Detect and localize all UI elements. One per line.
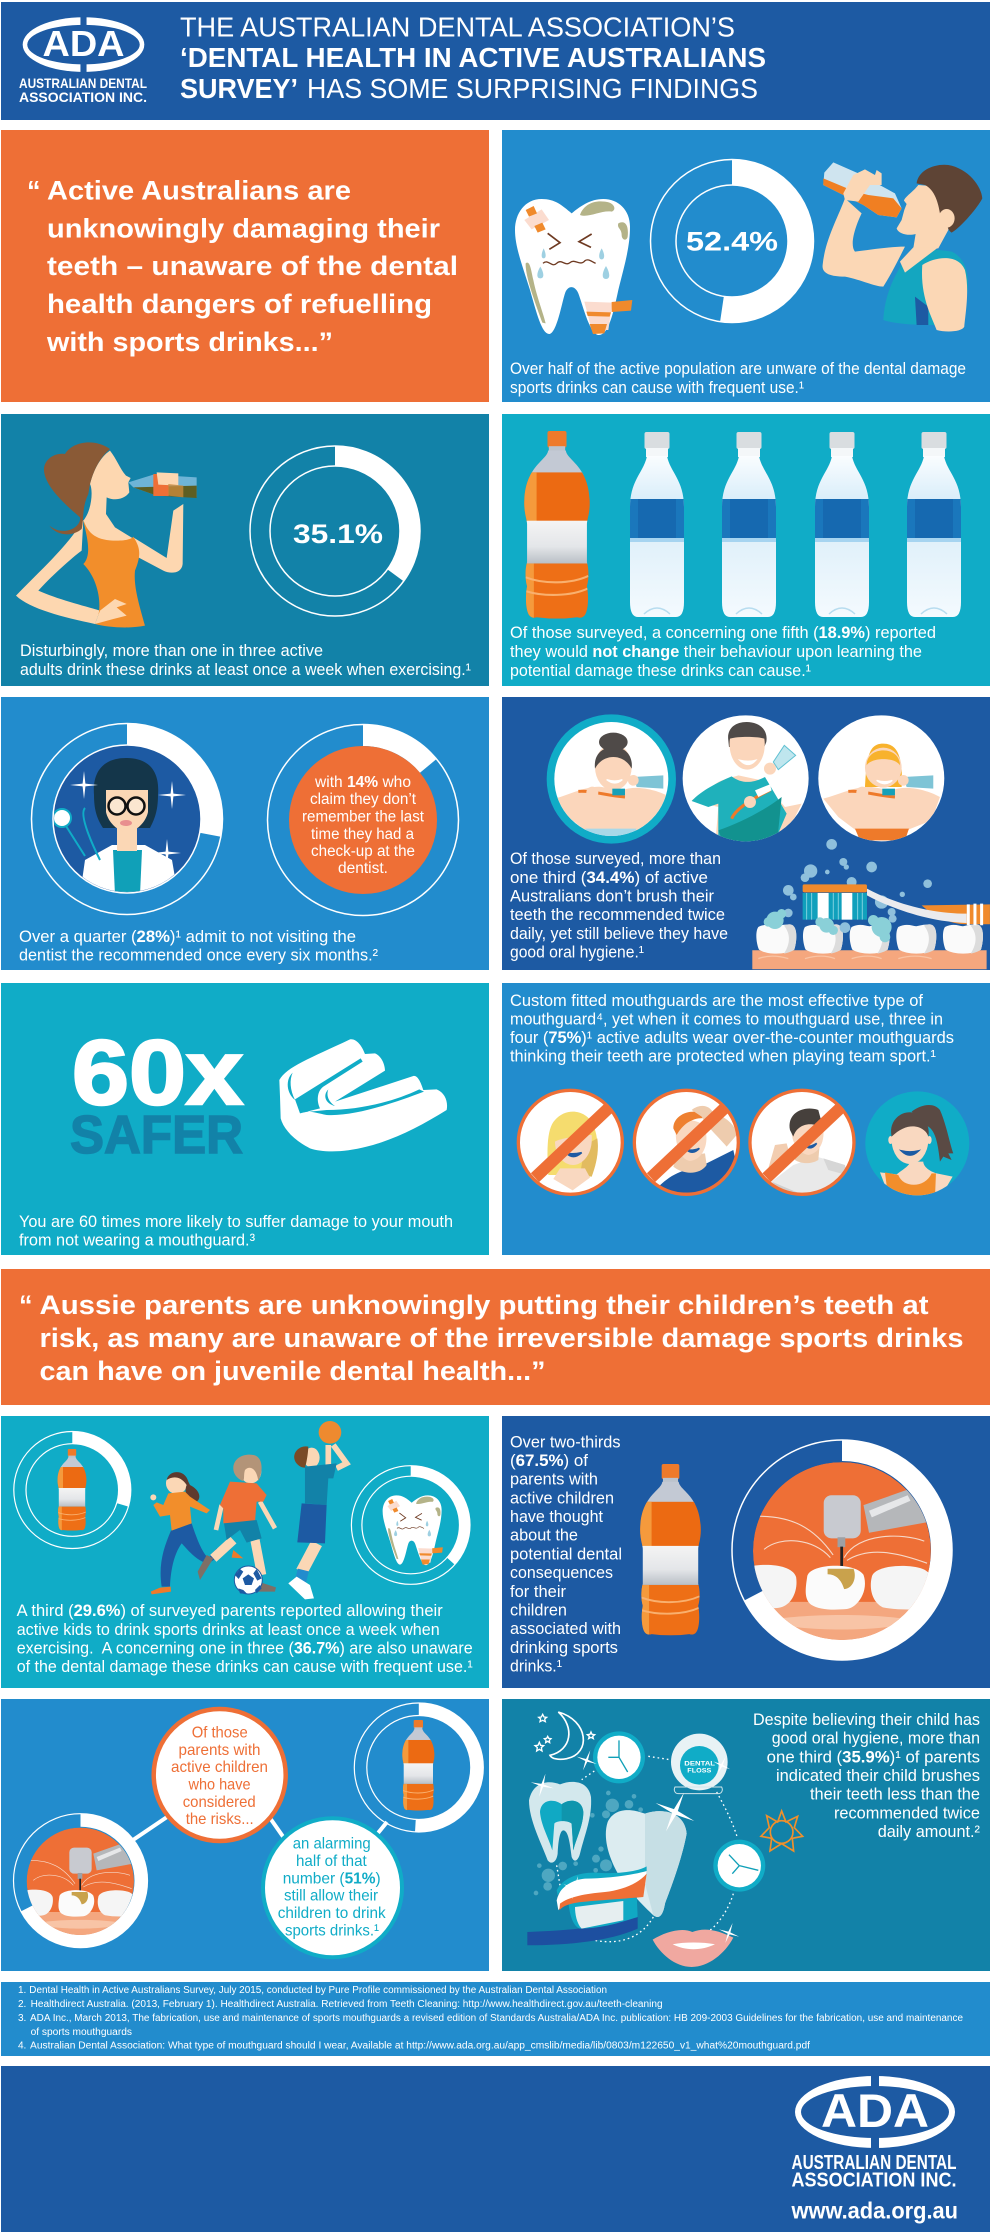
donut chart: 35.1% xyxy=(250,446,420,616)
caption: teeth the recommended twice xyxy=(510,906,725,924)
caption: associated with xyxy=(510,1620,621,1638)
caption xyxy=(510,850,728,962)
donut chart: 14% callout xyxy=(268,724,458,916)
caption: Over half of the active population are unware of the dental damage xyxy=(510,360,966,378)
donut chart: drill xyxy=(14,1814,148,1948)
caption: mouthguard⁴, yet when it comes to mouthguard use, three in xyxy=(510,1010,943,1028)
caption: daily amount.² xyxy=(878,1823,980,1841)
caption xyxy=(20,642,471,679)
caption: potential damage these drinks can cause.¹ xyxy=(510,662,811,680)
quote banner: Aussie parents: “ xyxy=(19,1290,32,1320)
quote banner: Aussie parents: can have on juvenile dental health...” xyxy=(40,1356,546,1386)
panel: 35.1 percent drink weekly xyxy=(1,414,489,686)
callout: half of that number: children to drink xyxy=(278,1905,387,1922)
donut chart: 29.6% with bottle xyxy=(14,1432,131,1548)
caption xyxy=(510,624,936,680)
illustration: toothbrush on teeth xyxy=(752,839,990,969)
icon: water bottles xyxy=(630,432,961,617)
quote text: “ xyxy=(27,176,40,206)
panel: mouthguards xyxy=(502,983,990,1255)
header title: HAS SOME SURPRISING FINDINGS xyxy=(307,73,758,104)
quote banner: Aussie parents: risk, as many are unaware of the irreversible damage sports drinks xyxy=(40,1323,964,1353)
caption: good oral hygiene.¹ xyxy=(510,944,644,962)
caption xyxy=(17,1602,473,1676)
caption: of the dental damage these drinks can cause with frequent use.¹ xyxy=(17,1658,473,1676)
icons: faces with mouthguards xyxy=(518,1090,969,1198)
footer xyxy=(1,2066,990,2232)
footnotes: Dental Health in Active Australians Survey, July 2015, conducted by Pure Profile commissioned by the Australian Dental Association xyxy=(29,1985,607,1996)
donut chart: 67.5% with drill xyxy=(732,1440,952,1660)
caption: they would not change their behaviour upon learning the xyxy=(510,643,922,661)
caption: recommended twice xyxy=(834,1804,980,1822)
ADA logo: ASSOCIATION INC. xyxy=(792,2170,956,2192)
ADA logo: ADA xyxy=(821,2084,929,2137)
illustration: dental care routine: FLOSS xyxy=(687,1768,711,1775)
illustration: dental care routine: DENTAL xyxy=(684,1761,715,1768)
callout: half of that number xyxy=(263,1818,402,1957)
illustration: woman drinking xyxy=(16,442,197,627)
footnotes: 2. xyxy=(18,1999,26,2010)
icon: damaged tooth xyxy=(515,199,632,335)
callout: half of that number: an alarming xyxy=(293,1836,371,1853)
quote text: Active Australians are xyxy=(47,176,351,206)
donut chart: bottle xyxy=(354,1703,483,1832)
illustration: man drinking xyxy=(823,162,982,331)
icon: sports drink bottle xyxy=(523,431,591,620)
caption xyxy=(510,1433,622,1675)
donut chart: 52.4%: 52.4% xyxy=(686,227,778,257)
callout: those parents: active children xyxy=(171,1759,268,1776)
caption: have thought xyxy=(510,1508,603,1526)
caption: one third (35.9%)¹ of parents xyxy=(767,1748,980,1766)
donut chart: 36.7% with tooth xyxy=(351,1466,470,1584)
caption: potential dental xyxy=(510,1545,622,1563)
quote text: with sports drinks...” xyxy=(46,327,333,357)
illustration: children playing sport xyxy=(150,1421,347,1599)
quote text: health dangers of refuelling xyxy=(47,289,432,319)
caption: thinking their teeth are protected when playing team sport.¹ xyxy=(510,1048,936,1066)
caption: indicated their child brushes xyxy=(776,1767,980,1785)
quote banner: Aussie parents: Aussie parents are unknowingly putting their children’s teeth at xyxy=(40,1290,928,1320)
caption: sports drinks can cause with frequent use.¹ xyxy=(510,379,804,397)
caption: daily, yet still believe they have xyxy=(510,925,728,943)
icon: mouthguard xyxy=(279,1039,447,1151)
header title xyxy=(180,12,766,104)
quote banner: Aussie parents xyxy=(1,1269,990,1405)
panel: dentist visits xyxy=(1,697,489,970)
donut chart: 14% callout: with 14% who xyxy=(314,774,411,791)
caption xyxy=(753,1711,980,1841)
caption: their teeth less than the xyxy=(810,1786,980,1804)
donut chart: 14% callout: remember the last xyxy=(302,809,425,826)
caption: active children xyxy=(510,1489,614,1507)
callout: those parents: who have xyxy=(188,1777,251,1794)
ADA logo: AUSTRALIAN DENTAL xyxy=(19,75,147,91)
donut chart: 14% callout: check-up at the xyxy=(311,843,415,860)
caption: drinking sports xyxy=(510,1639,618,1657)
ADA logo xyxy=(19,16,147,105)
header title: THE AUSTRALIAN DENTAL ASSOCIATION’S xyxy=(180,12,735,43)
ADA logo: ASSOCIATION INC. xyxy=(19,89,147,105)
panel: brushing habits xyxy=(502,697,990,970)
callout: those parents xyxy=(154,1709,286,1841)
footnotes: Australian Dental Association: What type of mouthguard should I wear, Available at http://www.ada.org.au/app_cmslib/media/lib/0803/m122650_v1_what%20mouthguard.pdf xyxy=(30,2041,810,2052)
donut chart: 35.1%: 35.1% xyxy=(293,519,383,549)
footnotes: of sports mouthguards xyxy=(31,2027,132,2038)
illustration: dental care routine xyxy=(527,1712,803,1967)
caption: good oral hygiene, more than xyxy=(772,1730,980,1748)
caption: Despite believing their child has xyxy=(753,1711,980,1729)
caption: (67.5%) of xyxy=(510,1452,588,1470)
caption: active kids to drink sports drinks at least once a week when xyxy=(17,1621,440,1639)
footnotes: 1. xyxy=(18,1985,26,1996)
caption: about the xyxy=(510,1527,578,1545)
quote text xyxy=(27,176,458,357)
caption: Custom fitted mouthguards are the most effective type of xyxy=(510,992,923,1010)
caption xyxy=(19,928,378,964)
donut chart: 28% with dentist xyxy=(32,724,222,914)
callout: those parents: parents with xyxy=(178,1742,260,1759)
caption: for their xyxy=(510,1583,567,1601)
caption: four (75%)¹ active adults wear over-the-counter mouthguards xyxy=(510,1029,954,1047)
panel: one fifth would not change xyxy=(502,414,990,686)
caption xyxy=(19,1213,453,1250)
panel: kids and sports drinks xyxy=(1,1416,489,1688)
footnotes: 3. xyxy=(18,2013,26,2024)
donut chart: 14% callout: time they had a xyxy=(311,826,414,843)
caption: A third (29.6%) of surveyed parents reported allowing their xyxy=(17,1602,443,1620)
footnotes: Healthdirect Australia. (2013, February 1). Healthdirect Australia. Retrieved from Teeth Cleaning: http://www.healthdirect.gov.au/teeth-cleaning xyxy=(31,1999,663,2010)
website address: www.ada.org.au xyxy=(791,2198,958,2224)
caption: exercising. A concerning one in three (36.7%) are also unaware xyxy=(17,1640,473,1658)
caption: drinks.¹ xyxy=(510,1657,562,1675)
caption: one third (34.4%) of active xyxy=(510,869,708,887)
panel: parents thought about consequences xyxy=(502,1416,990,1688)
callout: half of that number: half of that xyxy=(296,1853,367,1870)
callout: half of that number: sports drinks.¹ xyxy=(285,1922,379,1939)
heading: safer: SAFER xyxy=(70,1105,243,1165)
ADA logo xyxy=(792,2075,956,2192)
footnotes: 4. xyxy=(18,2041,26,2052)
quote text: teeth – unaware of the dental xyxy=(47,251,458,281)
panel: 52.4 percent unaware xyxy=(502,130,990,402)
footnotes: ADA Inc., March 2013, The fabrication, use and maintenance of sports mouthguards a revised edition of Standards Australia/ADA Inc. publication: HB 209-2003 Guidelines for the fabrication, use and maintenance xyxy=(30,2013,963,2024)
header banner xyxy=(1,2,990,120)
footnotes xyxy=(1,1982,990,2056)
quote text: unknowingly damaging their xyxy=(47,214,441,244)
caption: Over two-thirds xyxy=(510,1433,620,1451)
caption: children xyxy=(510,1601,567,1619)
caption: Australians don’t brush their xyxy=(510,888,714,906)
icon: sports drink bottle xyxy=(639,1464,702,1637)
heading: 60x: 60x xyxy=(72,1022,243,1124)
caption: adults drink these drinks at least once a week when exercising.¹ xyxy=(20,661,471,679)
header title: SURVEY’ xyxy=(180,73,298,104)
caption: You are 60 times more likely to suffer damage to your mouth xyxy=(19,1213,453,1231)
caption: Of those surveyed, a concerning one fifth (18.9%) reported xyxy=(510,624,936,642)
illustration: people brushing teeth xyxy=(547,714,944,847)
callout: half of that number: number (51%) xyxy=(283,1870,381,1887)
donut chart: 14% callout: claim they don’t xyxy=(310,791,417,808)
connector lines xyxy=(133,1817,387,1840)
donut chart: 14% callout: dentist. xyxy=(338,860,388,877)
caption: parents with xyxy=(510,1471,598,1489)
panel: child oral hygiene xyxy=(502,1699,990,1971)
callout: those parents: Of those xyxy=(192,1725,248,1742)
panel: half still allow drinks xyxy=(1,1699,489,1971)
caption: Over a quarter (28%)¹ admit to not visiting the xyxy=(19,928,356,946)
callout: those parents: considered xyxy=(183,1794,256,1811)
caption: dentist the recommended once every six months.² xyxy=(19,946,378,964)
caption xyxy=(510,360,966,397)
panel: active Australians quote xyxy=(1,130,489,402)
header title: ‘DENTAL HEALTH IN ACTIVE AUSTRALIANS xyxy=(180,42,766,73)
panel: 60x safer xyxy=(1,983,489,1255)
caption: consequences xyxy=(510,1564,613,1582)
caption: Disturbingly, more than one in three active xyxy=(20,642,323,660)
callout: those parents: the risks... xyxy=(186,1811,254,1828)
caption: from not wearing a mouthguard.³ xyxy=(19,1232,255,1250)
ADA logo: ADA xyxy=(42,24,125,64)
callout: half of that number: still allow their xyxy=(284,1888,379,1905)
caption: Of those surveyed, more than xyxy=(510,850,721,868)
donut chart: 52.4% xyxy=(650,160,814,322)
caption xyxy=(510,992,954,1066)
